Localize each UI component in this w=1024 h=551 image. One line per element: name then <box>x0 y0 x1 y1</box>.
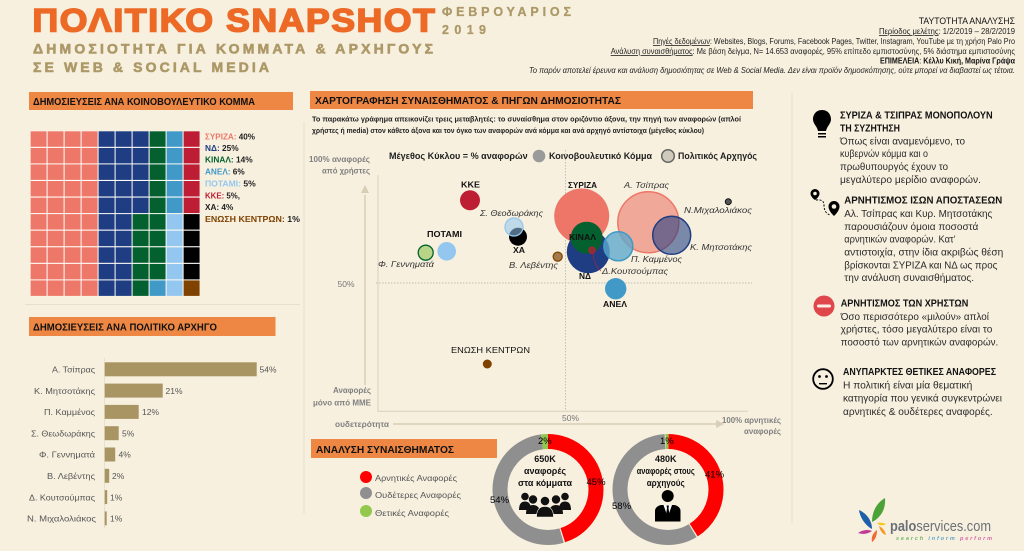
sentiment legend: Ουδέτερες Αναφορές <box>375 490 461 500</box>
bubble labels: Φ. Γεννηματά <box>378 259 435 269</box>
insight: monopoly: πρωθυπουργός έχουν το <box>840 161 948 173</box>
waffle legend: ΧΑ: 4% <box>205 202 234 212</box>
sentiment legend <box>360 471 461 518</box>
insight: users negativity: Όσο περισσότερο «μιλούν» απλοί <box>840 311 990 323</box>
donut chart: parties: 2% <box>538 436 552 447</box>
axis labels: 100% αρνητικές <box>722 416 781 425</box>
donut chart: leaders: 41% <box>705 470 725 481</box>
bubble labels: Ν.Μιχαλολιάκος <box>684 205 753 215</box>
panel: sentiment and source mapping <box>309 91 781 436</box>
axis labels: αναφορές <box>744 427 781 436</box>
insight: users negativity: ΑΡΝΗΤΙΣΜΟΣ ΤΩΝ ΧΡΗΣΤΩΝ <box>841 297 968 309</box>
chart description: χρήστες ή media) στον κάθετο άξονα και τον όγκο των αναφορών ανά κόμμα και ανά αρχηγό αντίστοιχα (μέγεθος κύκλου) <box>312 126 704 135</box>
subtitle: ΔΗΜΟΣΙΟΤΗΤΑ ΓΙΑ ΚΟΜΜΑΤΑ & ΑΡΧΗΓΟΥΣ <box>33 40 433 56</box>
waffle legend: ΑΝΕΛ: 6% <box>205 167 245 177</box>
waffle legend: ΠΟΤΑΜΙ: 5% <box>205 179 256 189</box>
donut chart: parties: 54% <box>490 495 510 506</box>
bar chart: 5% <box>122 428 135 438</box>
insight: equal distances: βρίσκονται ΣΥΡΙΖΑ και ΝΔ ως προς <box>844 259 997 271</box>
bubble labels <box>378 180 753 355</box>
insight: monopoly: ΣΥΡΙΖΑ & ΤΣΙΠΡΑΣ ΜΟΝΟΠΟΛΟΥΝ <box>840 109 993 121</box>
subtitle: ΣΕ WEB & SOCIAL MEDIA <box>33 59 269 75</box>
waffle legend <box>205 132 300 224</box>
insight: equal distances: αντιστοιχία, στην ίδια ακριβώς θέση <box>844 247 1003 259</box>
heading: mapping: ΧΑΡΤΟΓΡΑΦΗΣΗ ΣΥΝΑΙΣΘΗΜΑΤΟΣ & ΠΗΓΩΝ ΔΗΜΟΣΙΟΤΗΤΑΣ <box>315 95 621 107</box>
bar chart: Φ. Γεννηματά <box>39 450 95 460</box>
donut chart: leaders: αναφορές στους <box>637 466 695 476</box>
bar chart: Π. Καμμένος <box>44 407 95 417</box>
bubble labels: Σ. Θεοδωράκης <box>479 208 544 218</box>
insight: equal distances: αρνητικών αναφορών. Κατ’ <box>844 234 956 246</box>
donut chart: leaders: 58% <box>612 501 632 512</box>
analysis identity text block <box>529 16 1016 75</box>
bubble labels: ΣΥΡΙΖΑ <box>568 180 597 190</box>
axis labels: 50% <box>338 279 355 289</box>
donut chart: leaders: αρχηγούς <box>647 478 685 488</box>
bar chart: 1% <box>110 492 123 502</box>
insight: no positive mentions <box>813 366 1002 418</box>
waffle legend: ΚΙΝΑΛ: 14% <box>205 155 253 165</box>
axis labels: 100% αναφορές <box>309 155 370 164</box>
bubble labels: ΚΙΝΑΛ <box>569 232 596 242</box>
analysis identity text block: ΕΠΙΜΕΛΕΙΑ: Κέλλυ Κική, Μαρίνα Γράψα <box>880 56 1015 66</box>
bubble legend <box>389 150 757 162</box>
insight: users negativity: ποσοστό των αρνητικών αναφορών. <box>841 336 998 348</box>
logo: palo services: search inform perform <box>896 536 992 542</box>
donut chart: leaders <box>612 436 725 538</box>
chart description <box>312 115 741 135</box>
arrow: vertical axis <box>361 185 369 385</box>
bar chart: 12% <box>142 407 159 417</box>
date <box>442 5 571 37</box>
bubble labels: Α. Τσίπρας <box>623 180 670 190</box>
bubble labels: ΠΟΤΑΜΙ <box>427 229 462 239</box>
insight: no positive mentions: αρνητικές & ουδέτερες αναφορές. <box>843 406 993 418</box>
waffle legend: ΚΚΕ: 5%, <box>205 191 240 201</box>
heading: sentiment analysis <box>311 439 497 458</box>
insight: monopoly <box>813 109 993 186</box>
bubble chart <box>418 188 731 368</box>
heading: sentiment analysis: ΑΝΑΛΥΣΗ ΣΥΝΑΙΣΘΗΜΑΤΟΣ <box>316 444 454 456</box>
insight: equal distances: παρουσιάζουν όμοια ποσοστά <box>844 221 979 233</box>
heading: party publications: ΔΗΜΟΣΙΕΥΣΕΙΣ ΑΝΑ ΚΟΙΝΟΒΟΥΛΕΥΤΙΚΟ ΚΟΜΜΑ <box>33 96 255 108</box>
bar chart: 2% <box>112 471 125 481</box>
icon: route pins <box>810 189 840 216</box>
insight: users negativity <box>814 296 998 348</box>
bubble legend: Πολιτικός Αρχηγός <box>678 151 757 161</box>
bubble labels: ΕΝΩΣΗ ΚΕΝΤΡΩΝ <box>451 345 530 355</box>
icon: group of people <box>519 493 571 517</box>
arrow: horizontal axis <box>393 420 724 428</box>
insight: no positive mentions: κατηγορία που γενικά συγκεντρώνει <box>843 392 1002 404</box>
date: ΦΕΒΡΟΥΑΡΙΟΣ <box>442 5 571 19</box>
waffle legend: ΕΝΩΣΗ ΚΕΝΤΡΩΝ: 1% <box>205 214 300 224</box>
donut chart: leaders: 480K <box>655 454 677 464</box>
bar chart: 21% <box>166 386 183 396</box>
insight: no positive mentions: ΑΝΥΠΑΡΚΤΕΣ ΘΕΤΙΚΕΣ ΑΝΑΦΟΡΕΣ <box>843 366 996 378</box>
bubble labels: ΚΚΕ <box>461 180 480 190</box>
insight: equal distances: Αλ. Τσίπρας και Κυρ. Μητσοτάκης <box>844 208 992 220</box>
heading: party publications <box>29 92 293 110</box>
icon: light bulb <box>813 110 831 138</box>
waffle chart <box>30 131 200 296</box>
axis labels: μόνο από ΜΜΕ <box>313 398 372 408</box>
insight: equal distances <box>810 189 1003 284</box>
bar chart: Β. Λεβέντης <box>47 471 95 481</box>
heading: leader publications: ΔΗΜΟΣΙΕΥΣΕΙΣ ΑΝΑ ΠΟΛΙΤΙΚΟ ΑΡΧΗΓΟ <box>33 322 217 334</box>
bar chart <box>27 358 277 528</box>
icon: leader <box>655 490 680 522</box>
bar chart: 1% <box>110 514 123 524</box>
panel: sentiment analysis <box>311 436 725 538</box>
icon: neutral face <box>813 369 833 389</box>
insight: monopoly: ΤΗ ΣΥΖΗΤΗΣΗ <box>840 122 900 134</box>
insight: monopoly: κυβερνών κόμμα και ο <box>840 148 928 160</box>
bubble labels: Δ.Κουτσούμπας <box>601 266 669 276</box>
logo: palo services: paloservices.com <box>890 518 991 535</box>
bar chart: Κ. Μητσοτάκης <box>34 386 95 396</box>
waffle legend: ΣΥΡΙΖΑ: 40% <box>205 132 255 142</box>
insight: equal distances: την ανάλυση συναισθήματος. <box>844 272 974 284</box>
insight: monopoly: Όπως είναι αναμενόμενο, το <box>839 135 965 147</box>
axis labels: Αναφορές <box>333 386 371 395</box>
logo: palo services <box>858 498 992 542</box>
chart axes <box>376 150 752 412</box>
bar chart: Δ. Κουτσούμπας <box>29 492 95 502</box>
analysis identity text block: Περίοδος μελέτης: 1/2/2019 – 28/2/2019 <box>879 27 1016 36</box>
donut chart: parties: αναφορές <box>524 466 566 476</box>
sentiment legend: Θετικές Αναφορές <box>375 508 449 518</box>
bar chart: Ν. Μιχαλολιάκος <box>27 514 96 524</box>
waffle legend: ΝΔ: 25% <box>205 143 239 153</box>
donut chart: parties: 650K <box>534 454 556 464</box>
bubble legend: Κοινοβουλευτικό Κόμμα <box>549 151 652 161</box>
bar chart: 4% <box>118 450 131 460</box>
insight: no positive mentions: Η πολιτική είναι μία θεματική <box>843 379 972 391</box>
donut chart: parties: 45% <box>586 477 606 488</box>
insight: users negativity: χρήστες, τόσο μεγαλύτερο είναι το <box>841 324 993 336</box>
axis labels <box>309 155 781 436</box>
heading: leader publications <box>29 317 276 336</box>
bar chart: Σ. Θεωδωράκης <box>31 428 95 438</box>
bar chart: Α. Τσίπρας <box>52 364 95 374</box>
analysis identity text block: ΤΑΥΤΟΤΗΤΑ ΑΝΑΛΥΣΗΣ <box>919 16 1015 27</box>
donut chart: leaders: 1% <box>660 436 674 447</box>
sentiment legend: Αρνητικές Αναφορές <box>375 473 457 483</box>
bubble labels: ΧΑ <box>513 245 525 255</box>
donut chart: parties <box>490 436 606 538</box>
donut chart: parties: στα κόμματα <box>518 478 572 488</box>
icon: minus sign <box>814 296 834 316</box>
heading: mapping <box>310 91 753 109</box>
bubble labels: ΝΔ <box>579 271 591 281</box>
bubble labels: Π. Καμμένος <box>631 254 683 264</box>
chart description: Το παρακάτω γράφημα απεικονίζει τρεις μεταβλητές: το συναίσθημα στον οριζόντιο άξονα, την πηγή των αναφορών (απλοί <box>312 115 741 124</box>
insight: monopoly: μεγαλύτερο μερίδιο αναφορών. <box>840 174 981 186</box>
bar chart: 54% <box>260 364 277 374</box>
subtitle <box>33 40 433 75</box>
bubble labels: Β. Λεβέντης <box>509 260 559 270</box>
axis labels: από χρήστες <box>322 166 370 176</box>
bubble legend: Μέγεθος Κύκλου = % αναφορών <box>389 151 528 161</box>
date: 2019 <box>442 23 486 37</box>
bubble labels: Κ. Μητσοτάκης <box>690 242 753 252</box>
insight: equal distances: ΑΡΝΗΤΙΣΜΟΣ ΙΣΩΝ ΑΠΟΣΤΑΣΕΩΝ <box>844 194 1002 206</box>
panel: insights <box>810 109 1003 418</box>
panel: leader publications <box>27 317 277 528</box>
axis labels: 50% <box>562 413 579 423</box>
panel: party publications <box>29 92 300 296</box>
title: ΠΟΛΙΤΙΚΟ SNAPSHOT <box>32 2 436 38</box>
bubble labels: ΑΝΕΛ <box>603 299 627 309</box>
axis labels: ουδετερότητα <box>335 420 389 429</box>
